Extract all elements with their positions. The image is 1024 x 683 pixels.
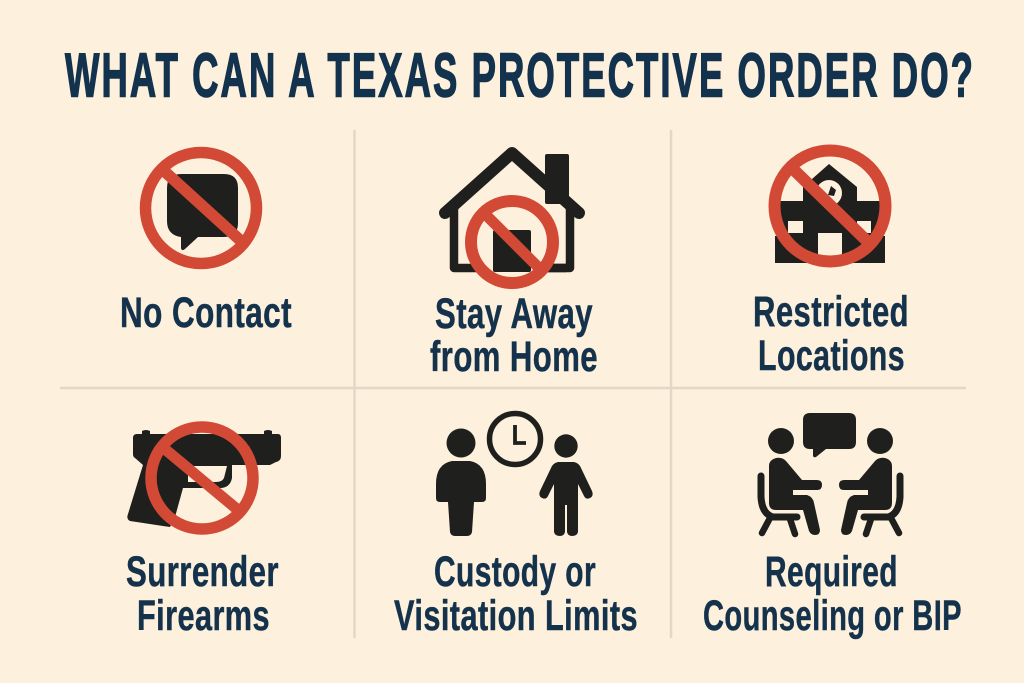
label: custody or visitation limits: Visitation Limits	[394, 592, 638, 640]
label: no contact: No Contact	[120, 289, 292, 337]
panel: surrender firearms	[126, 427, 281, 640]
icon: handgun prohibited	[127, 427, 281, 529]
label: surrender firearms: Surrender	[126, 548, 279, 596]
label: surrender firearms	[126, 548, 279, 640]
panel: custody or visitation limits	[394, 414, 638, 640]
panel: stay away from home	[430, 153, 598, 381]
icon: house prohibited	[445, 153, 579, 286]
label: restricted locations	[753, 288, 909, 380]
icon: speech bubble prohibited	[146, 152, 256, 264]
icon: two seated people with speech bubble	[761, 413, 900, 535]
label: required counseling or BIP: Required	[765, 548, 898, 596]
label: restricted locations: Locations	[758, 332, 905, 380]
icon: adult, child and clock	[436, 414, 593, 536]
label: surrender firearms: Firearms	[137, 592, 270, 640]
panel: restricted locations	[753, 150, 909, 380]
label: custody or visitation limits: Custody or	[434, 548, 596, 596]
panel: required counseling or BIP	[703, 413, 962, 640]
label: custody or visitation limits	[394, 548, 638, 640]
label: stay away from home	[430, 290, 598, 381]
label: restricted locations: Restricted	[753, 288, 909, 336]
panel: no contact	[120, 152, 292, 337]
label: stay away from home: from Home	[430, 333, 598, 381]
label: required counseling or BIP	[703, 548, 962, 640]
icon: building prohibited	[774, 150, 886, 263]
label: stay away from home: Stay Away	[435, 290, 593, 338]
